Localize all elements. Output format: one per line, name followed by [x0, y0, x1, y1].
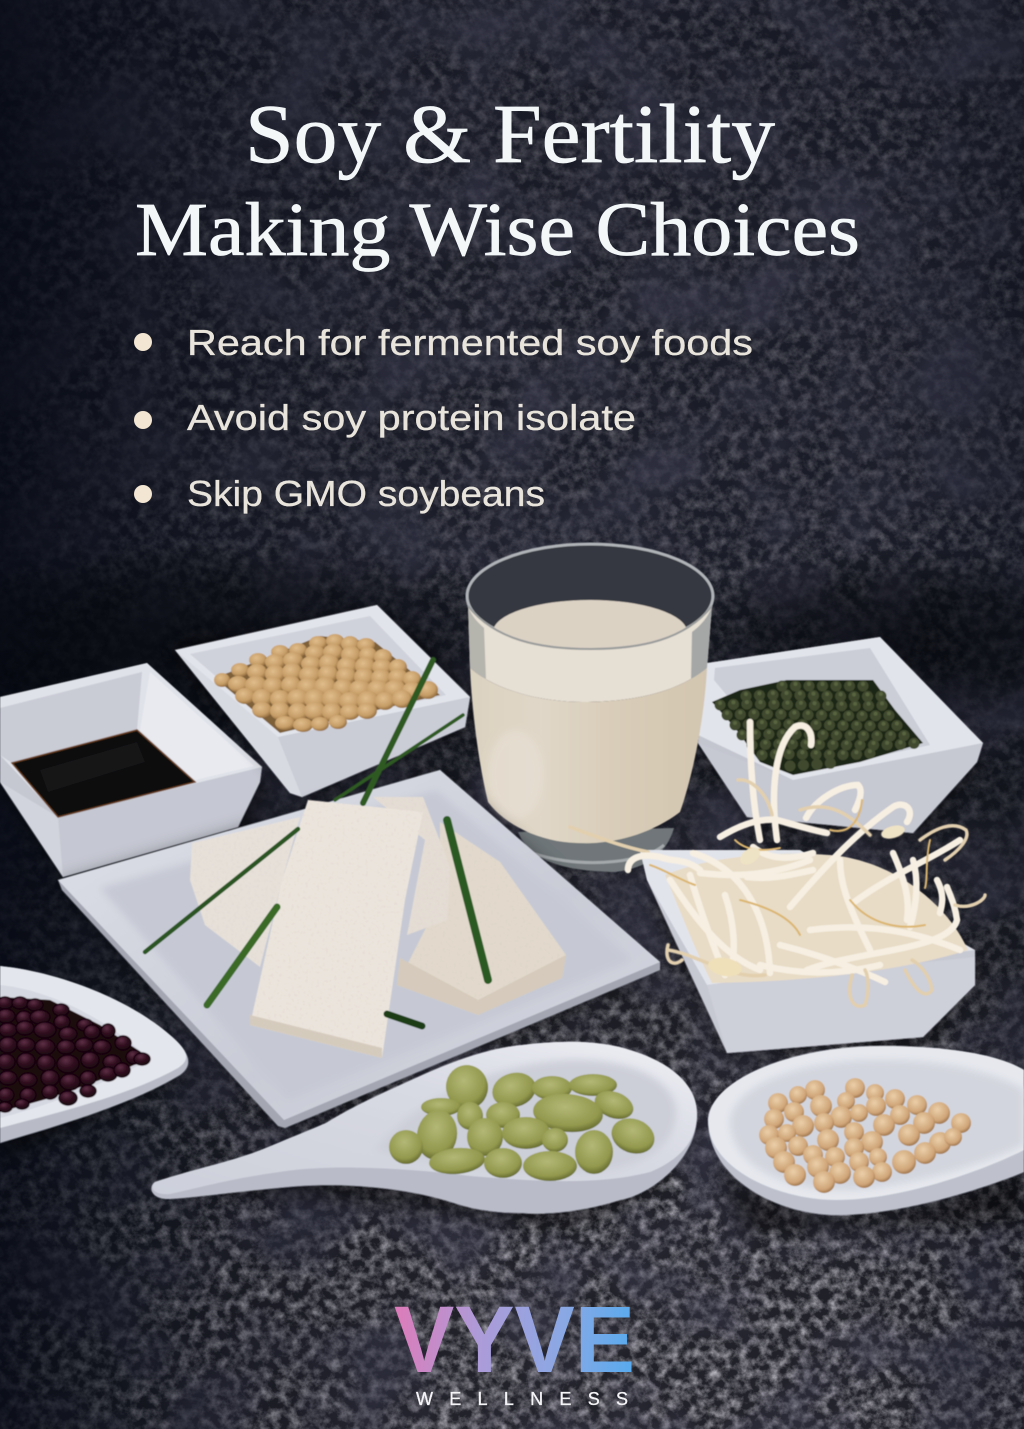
- tofu: front block: [250, 800, 423, 1058]
- soybeans: [214, 634, 440, 733]
- chives: [145, 660, 488, 1026]
- glass of soy milk: [467, 544, 713, 872]
- soy pea dish: [708, 1046, 1024, 1235]
- title: [135, 88, 860, 272]
- bullet 1: Reach for fermented soy foods: [187, 322, 753, 363]
- logo wordmark: VYVE: [394, 1287, 635, 1393]
- tofu: left block: [190, 817, 300, 967]
- food photo: soy foods on white dishes: [0, 544, 1024, 1235]
- edamame: [389, 1062, 659, 1181]
- title: Soy & Fertility: [245, 88, 775, 181]
- square plate: [58, 770, 660, 1130]
- soybeans bowl: [175, 605, 470, 800]
- bullet list: [134, 322, 753, 514]
- logo: VYVE Wellness: [394, 1287, 635, 1409]
- sprout mass: [570, 722, 985, 1006]
- red adzuki bean dish: [0, 966, 195, 1160]
- bean sprout bowl: [570, 722, 985, 1060]
- tofu blocks: [190, 797, 566, 1058]
- red beans: [0, 997, 150, 1112]
- bullet 3: Skip GMO soybeans: [187, 473, 545, 514]
- logo subtitle: WELLNESS: [416, 1389, 628, 1409]
- spoon dish: [151, 1042, 705, 1228]
- tofu: right block: [397, 822, 566, 1015]
- mung beans: [712, 680, 923, 775]
- tofu: back block: [373, 797, 450, 935]
- title: Making Wise Choices: [135, 188, 860, 272]
- mung bean bowl: [698, 637, 985, 840]
- soy peas: [759, 1078, 971, 1193]
- bullet 2: Avoid soy protein isolate: [187, 397, 636, 438]
- soy sauce bowl: [0, 663, 270, 885]
